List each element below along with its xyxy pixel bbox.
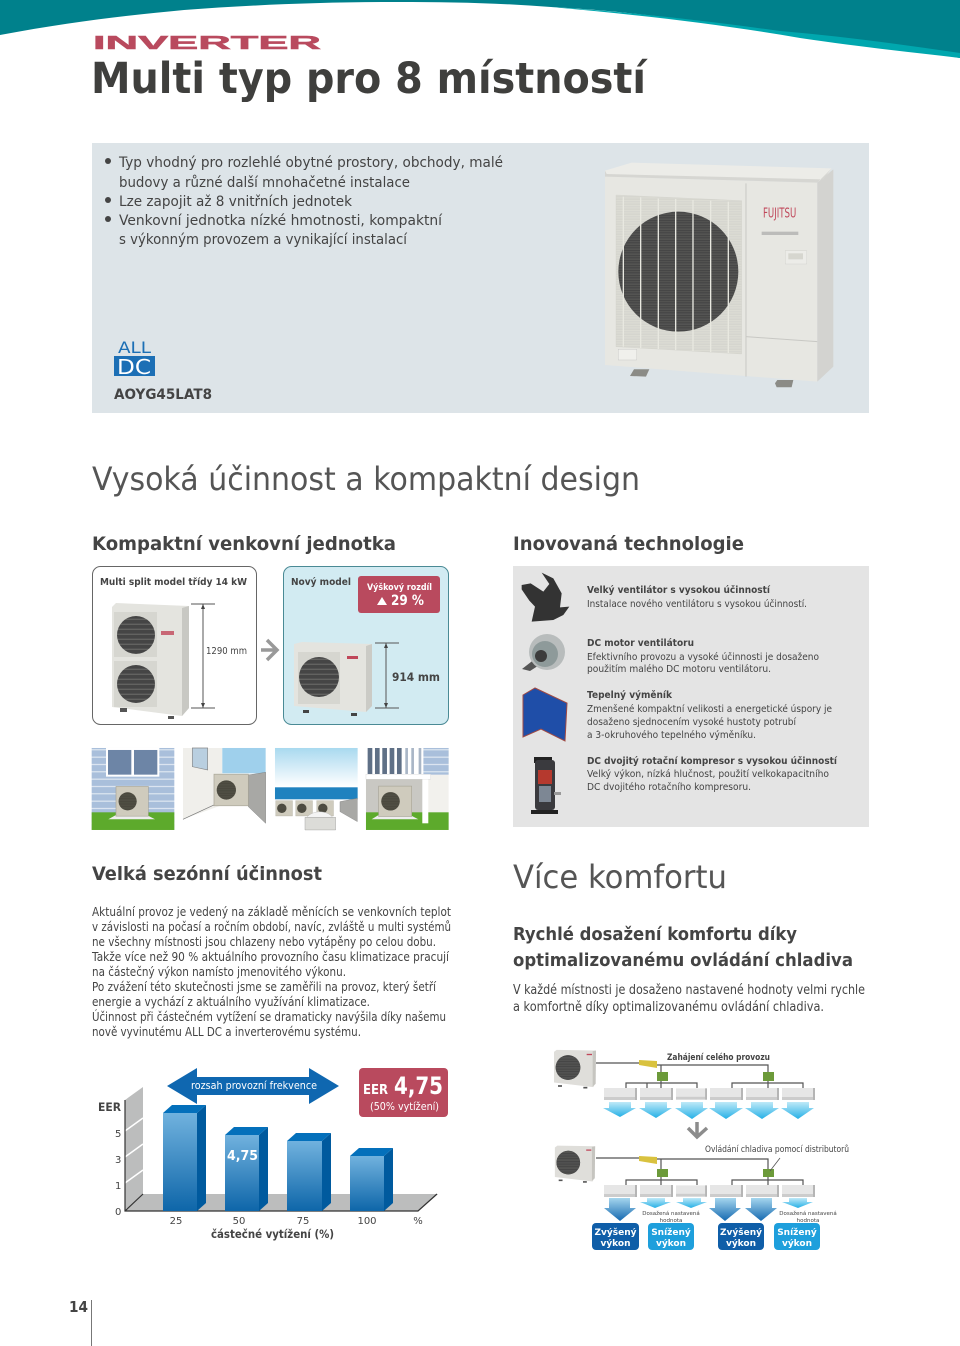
scene: seaside units	[275, 748, 358, 830]
page number: 14	[69, 1298, 88, 1316]
model name: AOYG45LAT8	[114, 387, 212, 403]
new unit image	[294, 642, 372, 716]
badge: EER 4,75: (50% vytížení)	[370, 1101, 439, 1113]
badge: EER 4,75: 4,75	[394, 1072, 443, 1100]
x axis labels: 50	[233, 1216, 245, 1227]
x axis labels	[170, 1216, 423, 1241]
text block: seasonal efficiency: Účinnost při částečném vytížení se dramaticky navýšila díky našemu	[92, 1009, 446, 1024]
tech item 1: Velký ventilátor s vysokou účinností	[587, 585, 771, 596]
logo on unit: FUJITSU	[763, 207, 796, 222]
label: increased output 1: Zvýšený	[594, 1227, 637, 1238]
tech item 4: DC dvojitý rotační kompresor s vysokou účinností	[587, 756, 838, 767]
tech item 1: Instalace nového ventilátoru s vysokou účinností.	[587, 598, 807, 610]
text block: seasonal efficiency	[91, 905, 451, 1039]
label: reduced output 1: Snížený	[651, 1228, 691, 1238]
label: reduced output 1: výkon	[656, 1239, 686, 1249]
old unit image	[112, 603, 189, 719]
diagram: controlled operation: Dosažená nastavená	[779, 1210, 837, 1217]
arrow: old to new	[261, 640, 277, 660]
diagram: full operation	[554, 1050, 815, 1119]
panel: old model	[92, 566, 256, 724]
text block: seasonal efficiency: ne všechny místnosti jsou chlazeny nebo vytápěny po celou dobu.	[92, 935, 436, 949]
tech item 2: DC motor ventilátoru	[587, 638, 694, 649]
diagram: controlled operation: hodnota	[660, 1218, 682, 1224]
text block: comfort	[513, 983, 865, 1015]
panel: technology	[513, 566, 869, 827]
text block: seasonal efficiency: nově vyvinutému ALL DC a inverterovému systému.	[92, 1025, 361, 1039]
label: reduced output 1	[648, 1223, 694, 1250]
scene: corner wall	[183, 748, 266, 830]
label: increased output 1: výkon	[600, 1239, 631, 1249]
subheading: quick comfort	[513, 924, 853, 971]
text block: seasonal efficiency: Takže více než 90 % aktuálního provozního času klimatizace pracují	[91, 950, 450, 964]
icon: fan blade	[522, 573, 569, 622]
x axis labels: 100	[357, 1216, 377, 1227]
text block: seasonal efficiency: energie a vychází z aktuálního využívání klimatizace.	[92, 995, 370, 1009]
tech item 4	[587, 756, 838, 793]
logo: ALL DC: DC	[117, 355, 151, 379]
tech item 3: dosaženo sjednocením vysoké hustoty potrubí	[587, 716, 797, 728]
title: Multi typ pro 8 místností	[91, 54, 648, 104]
refrigerant control diagram	[554, 1050, 849, 1250]
scene: under balcony	[366, 748, 449, 830]
bullet list: Lze zapojit až 8 vnitřních jednotek	[119, 194, 353, 210]
label: increased output 2: Zvýšený	[720, 1227, 762, 1238]
bar: 25	[163, 1105, 206, 1211]
subheading: technology: Inovovaná technologie	[513, 533, 744, 555]
tech item 3: Zmenšené kompaktní velikosti a energetické úspory je	[587, 703, 832, 715]
text block: seasonal efficiency: v závislosti na počasí a ročním období, navíc, zvláště u multi systémů	[92, 920, 451, 934]
label: reduced output 2	[774, 1223, 820, 1250]
icon: fan motor	[522, 634, 565, 671]
bar: 100	[350, 1148, 393, 1211]
label: reduced output 2: Snížený	[777, 1228, 817, 1238]
text block: seasonal efficiency: Aktuální provoz je vedený na základě měnících se venkovních teplot	[92, 905, 451, 919]
tech item 2	[587, 638, 819, 675]
bar: 50	[225, 1127, 268, 1211]
subheading: quick comfort: Rychlé dosažení komfortu díky	[513, 924, 797, 945]
bullet list: budovy a různé další mnohačetné instalace	[119, 175, 410, 191]
x axis labels: 75	[297, 1216, 309, 1227]
tech item 2: Efektivního provozu a vysoké účinnosti je dosaženo	[587, 651, 819, 663]
diagram: controlled operation: Ovládání chladiva pomocí distributorů	[705, 1144, 849, 1155]
tech item 3: a 3-okruhového tepelného výměníku.	[587, 729, 756, 741]
y axis labels: 3	[115, 1155, 121, 1166]
text block: seasonal efficiency: Po zvážení této skutečnosti jsme se zaměřili na provoz, který šetří	[92, 980, 437, 994]
y axis labels: 1	[115, 1181, 121, 1192]
tech item 3: Tepelný výměník	[587, 690, 673, 701]
y axis labels: EER	[98, 1100, 121, 1114]
badge: height difference: Výškový rozdíl	[367, 582, 432, 593]
tech item 3	[587, 690, 832, 741]
x axis labels: částečné vytížení (%)	[211, 1227, 334, 1241]
diagram: controlled operation: Dosažená nastavená	[642, 1210, 700, 1217]
text block: comfort: V každé místnosti je dosaženo nastavené hodnoty velmi rychle	[513, 983, 865, 998]
dimension 914 mm: 914 mm	[392, 670, 440, 684]
y axis labels	[98, 1100, 121, 1218]
label: increased output 2	[718, 1223, 764, 1250]
diagram: controlled operation: hodnota	[797, 1218, 819, 1224]
bar: 75	[287, 1133, 331, 1211]
bullet list: s výkonným provozem a vynikající instalací	[119, 232, 408, 248]
dimension 914 mm	[375, 643, 440, 708]
text block: comfort: a komfortně díky optimalizovanému ovládání chladiva.	[513, 1000, 824, 1015]
icon: compressor	[531, 757, 561, 814]
heading: seasonal efficiency: Velká sezónní účinnost	[92, 863, 322, 885]
panel: new model	[284, 566, 448, 724]
badge: height difference: 29 %	[391, 593, 424, 609]
panel: old model: Multi split model třídy 14 kW	[100, 576, 247, 588]
arrow: down	[688, 1122, 707, 1137]
heading: more comfort: Více komfortu	[513, 858, 727, 896]
label: increased output 1	[592, 1223, 639, 1250]
badge: EER 4,75: EER	[363, 1083, 388, 1098]
logo: ALL DC: ALL	[118, 338, 151, 357]
tech item 4: DC dvojitého rotačního kompresoru.	[587, 781, 751, 793]
dimension 1290 mm: 1290 mm	[206, 646, 247, 657]
logo: ALL DC	[114, 338, 155, 379]
tech item 2: použitím malého DC motoru ventilátoru.	[587, 663, 771, 675]
chart floor and wall	[125, 1087, 438, 1211]
bullet list	[105, 155, 503, 248]
panel: new model: Nový model	[291, 576, 351, 588]
label: reduced output 2: výkon	[782, 1239, 812, 1249]
x axis labels: %	[413, 1216, 423, 1227]
scene: wall with window	[92, 748, 174, 830]
section heading: high efficiency: Vysoká účinnost a kompaktní design	[92, 460, 640, 498]
bullet list: Typ vhodný pro rozlehlé obytné prostory, obchody, malé	[118, 155, 503, 171]
badge: height difference	[358, 576, 440, 613]
tech item 1	[587, 585, 807, 610]
page number	[69, 1298, 92, 1346]
bar: 50: 4,75	[227, 1149, 258, 1164]
brand label: INVERTER: INVERTER	[93, 33, 321, 53]
text block: seasonal efficiency: na částečný výkon namísto jmenovitého výkonu.	[92, 965, 346, 979]
installation scenes	[92, 748, 449, 830]
outdoor unit photo	[605, 163, 833, 387]
diagram: controlled operation	[555, 1144, 849, 1224]
icon: heat exchanger	[523, 688, 567, 741]
y axis labels: 0	[115, 1207, 121, 1218]
dimension 1290 mm	[191, 604, 247, 708]
top teal curved band	[0, 0, 960, 58]
y axis labels: 5	[115, 1129, 121, 1140]
panel: product intro	[92, 143, 869, 413]
diagram: full operation: Zahájení celého provozu	[667, 1052, 770, 1063]
bullet list: Venkovní jednotka nízké hmotnosti, kompaktní	[119, 213, 443, 229]
subheading: quick comfort: optimalizovanému ovládání chladiva	[513, 950, 853, 971]
label: increased output 2: výkon	[726, 1239, 756, 1249]
badge: EER 4,75	[359, 1068, 448, 1117]
arrow: frequency range: rozsah provozní frekvence	[191, 1080, 317, 1092]
bar chart: EER by partial load	[98, 1068, 448, 1241]
x axis labels: 25	[170, 1216, 182, 1227]
tech item 4: Velký výkon, nízká hlučnost, použití velkokapacitního	[587, 768, 829, 780]
arrow: frequency range	[167, 1068, 339, 1104]
subheading: compact unit: Kompaktní venkovní jednotka	[92, 533, 396, 555]
